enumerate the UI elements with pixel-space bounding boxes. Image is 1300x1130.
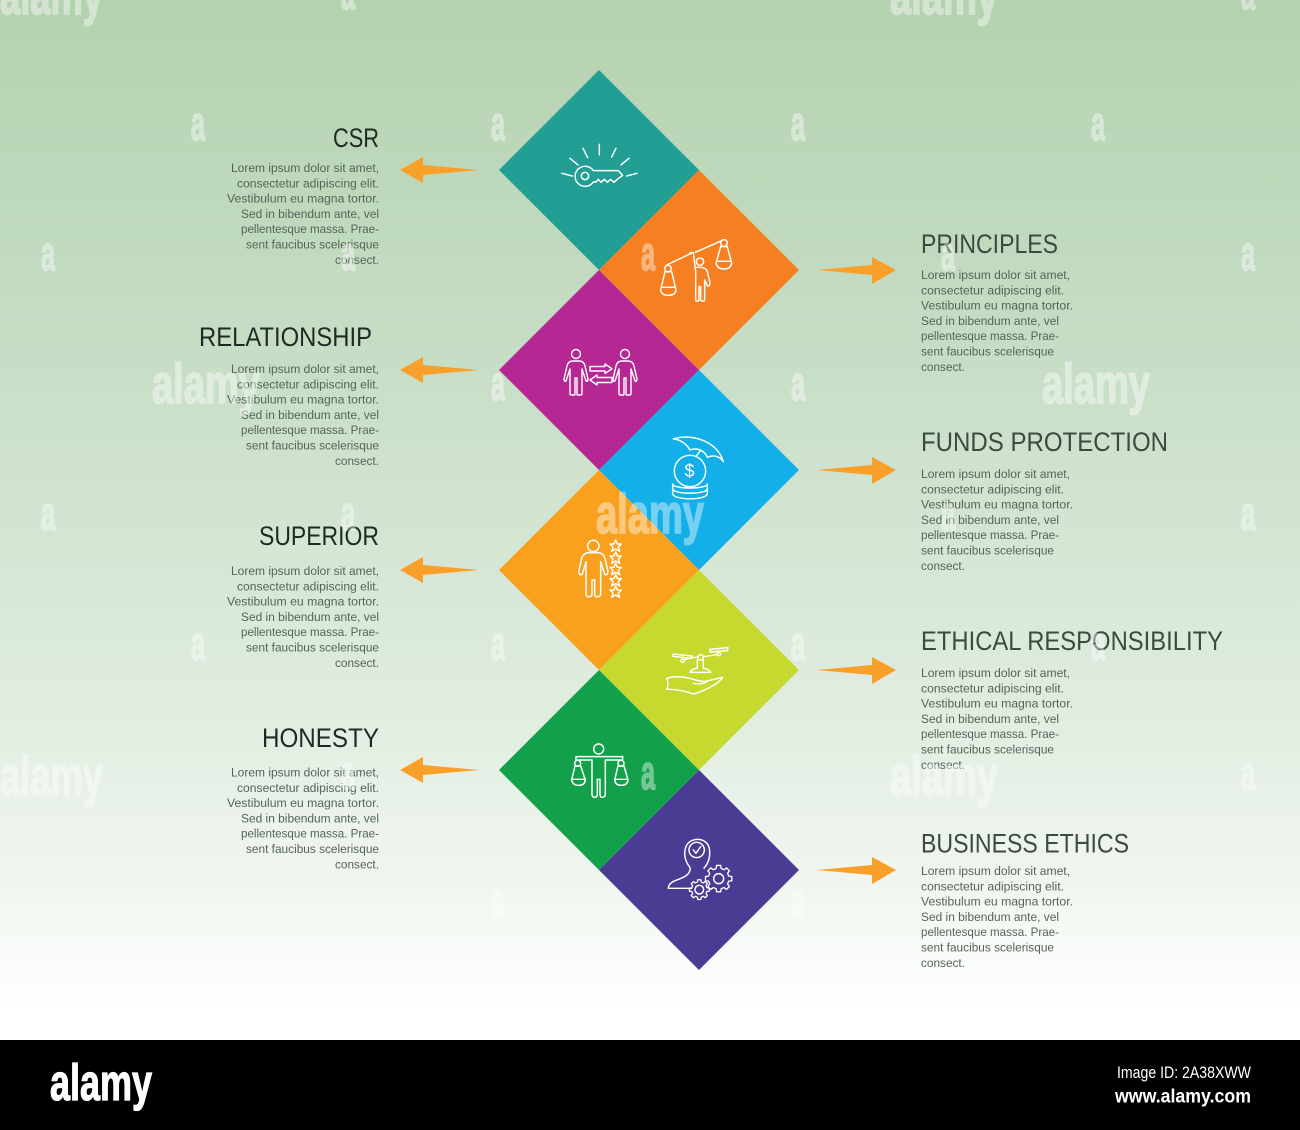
- text block: principles: [921, 268, 1073, 374]
- text block: relationship: [227, 362, 379, 468]
- text block: principles: Vestibulum eu magna tortor.: [921, 299, 1073, 313]
- watermark overlay: a: [1091, 98, 1105, 151]
- text block: superior: sent faucibus scelerisque: [246, 640, 379, 654]
- text block: superior: Lorem ipsum dolor sit amet,: [231, 564, 379, 578]
- diamond: principles: [599, 170, 799, 370]
- heading: funds protection: FUNDS PROTECTION: [921, 427, 1168, 457]
- text block: ethical responsibility: Lorem ipsum dolor sit amet,: [921, 666, 1070, 680]
- watermark overlay: alamy: [152, 352, 260, 415]
- text block: funds protection: Vestibulum eu magna tortor.: [921, 498, 1073, 512]
- watermark overlay: a: [641, 747, 655, 800]
- heading: honesty: HONESTY: [262, 723, 379, 753]
- text block: superior: consect.: [335, 656, 379, 670]
- watermark overlay: a: [1091, 618, 1105, 671]
- text block: honesty: [227, 766, 379, 871]
- watermark overlay: a: [641, 228, 655, 281]
- icon: dollar sign: $: [684, 461, 695, 481]
- watermark overlay: a: [41, 228, 55, 281]
- text block: relationship: Vestibulum eu magna tortor.: [227, 393, 379, 407]
- text block: superior: pellentesque massa. Prae-: [241, 625, 379, 639]
- watermark overlay: a: [341, 488, 355, 541]
- text block: CSR: pellentesque massa. Prae-: [241, 222, 379, 236]
- text block: business ethics: consectetur adipiscing elit.: [921, 879, 1064, 893]
- icon: umbrella over coins: [673, 437, 723, 499]
- diamond: relationship: [499, 270, 699, 470]
- watermark overlay: a: [491, 98, 505, 151]
- watermark overlay: alamy: [1042, 352, 1150, 415]
- watermark overlay: a: [941, 488, 955, 541]
- text block: CSR: consect.: [335, 253, 379, 267]
- text block: relationship: Sed in bibendum ante, vel: [241, 408, 379, 422]
- diamond: CSR: [499, 70, 699, 270]
- text block: ethical responsibility: consectetur adipiscing elit.: [921, 681, 1064, 695]
- diamond chain: [499, 70, 799, 970]
- text block: relationship: consect.: [335, 454, 379, 468]
- watermark overlay: a: [1241, 228, 1255, 281]
- icon: hand holding scale: [667, 648, 728, 694]
- watermark overlay: a: [341, 228, 355, 281]
- text block: funds protection: consect.: [921, 559, 965, 573]
- text block: funds protection: Lorem ipsum dolor sit amet,: [921, 467, 1070, 481]
- text block: superior: consectetur adipiscing elit.: [237, 579, 379, 593]
- text block: honesty: consect.: [335, 857, 379, 871]
- text block: funds protection: consectetur adipiscing elit.: [921, 482, 1064, 496]
- text block: relationship: Lorem ipsum dolor sit amet,: [231, 362, 379, 376]
- icon: person as balance: [572, 744, 628, 797]
- watermark overlay: a: [791, 98, 805, 151]
- text block: funds protection: pellentesque massa. Prae-: [921, 528, 1059, 542]
- watermark overlay: a: [941, 228, 955, 281]
- arrow: CSR: [400, 157, 479, 183]
- watermark overlay: a: [41, 488, 55, 541]
- watermark overlay: a: [1241, 747, 1255, 800]
- text block: funds protection: [921, 467, 1073, 573]
- text block: business ethics: consect.: [921, 956, 965, 970]
- heading: ethical responsibility: ETHICAL RESPONSIBILITY: [921, 626, 1223, 656]
- icon: person lifting scales: [661, 240, 732, 301]
- text block: ethical responsibility: Vestibulum eu magna tortor.: [921, 697, 1073, 711]
- text block: ethical responsibility: sent faucibus scelerisque: [921, 742, 1054, 756]
- heading: superior: SUPERIOR: [259, 521, 379, 551]
- arrow: relationship: [400, 357, 479, 383]
- text block: business ethics: Vestibulum eu magna tortor.: [921, 895, 1073, 909]
- text block: superior: Sed in bibendum ante, vel: [241, 610, 379, 624]
- watermark overlay: a: [341, 747, 355, 800]
- text block: principles: Lorem ipsum dolor sit amet,: [921, 268, 1070, 282]
- text block: principles: consect.: [921, 360, 965, 374]
- icon: person with five stars: [579, 540, 621, 597]
- text block: relationship: consectetur adipiscing elit.: [237, 377, 379, 391]
- text block: honesty: pellentesque massa. Prae-: [241, 827, 379, 841]
- watermark overlay: a: [191, 98, 205, 151]
- icon: two people exchanging: [564, 350, 637, 395]
- text block: business ethics: pellentesque massa. Prae-: [921, 925, 1059, 939]
- diamond: honesty: [499, 670, 699, 870]
- website: www.alamy.com: [1114, 1086, 1251, 1108]
- text block: ethical responsibility: pellentesque massa. Prae-: [921, 727, 1059, 741]
- image id: Image ID: 2A38XWW: [1117, 1063, 1251, 1082]
- watermark overlay: alamy: [596, 482, 704, 545]
- text block: relationship: sent faucibus scelerisque: [246, 438, 379, 452]
- arrow: business ethics: [817, 857, 896, 884]
- text block: principles: Sed in bibendum ante, vel: [921, 314, 1059, 328]
- watermark overlay: a: [491, 358, 505, 411]
- diamond: funds protection: [599, 370, 799, 570]
- watermark overlay: a: [791, 358, 805, 411]
- watermark overlay: alamy: [0, 744, 103, 807]
- text block: CSR: Lorem ipsum dolor sit amet,: [231, 161, 379, 175]
- watermark overlay: a: [1241, 488, 1255, 541]
- text block: business ethics: sent faucibus scelerisque: [921, 940, 1054, 954]
- text block: honesty: Vestibulum eu magna tortor.: [227, 796, 379, 810]
- heading: CSR: CSR: [333, 123, 379, 153]
- text block: honesty: Lorem ipsum dolor sit amet,: [231, 766, 379, 780]
- heading: business ethics: BUSINESS ETHICS: [921, 828, 1129, 858]
- text block: business ethics: Lorem ipsum dolor sit amet,: [921, 864, 1070, 878]
- text block: superior: [227, 564, 379, 670]
- arrow: funds protection: [817, 457, 896, 484]
- footer logo: alamy: [50, 1054, 152, 1111]
- diamond: superior: [499, 470, 699, 670]
- text block: CSR: Sed in bibendum ante, vel: [241, 207, 379, 221]
- watermark overlay: alamy: [890, 744, 998, 807]
- text block: honesty: Sed in bibendum ante, vel: [241, 811, 379, 825]
- text block: principles: consectetur adipiscing elit.: [921, 283, 1064, 297]
- icon: head with check and gears: [668, 839, 732, 900]
- watermark overlay: a: [791, 875, 805, 928]
- text block: CSR: [227, 161, 379, 267]
- text block: honesty: sent faucibus scelerisque: [246, 842, 379, 856]
- footer bar: [0, 1040, 1300, 1130]
- text block: honesty: consectetur adipiscing elit.: [237, 781, 379, 795]
- diamond: ethical responsibility: [599, 570, 799, 770]
- watermark overlay: [0, 0, 1255, 928]
- watermark overlay: a: [491, 875, 505, 928]
- icon: shining key: [562, 144, 637, 186]
- text block: business ethics: Sed in bibendum ante, vel: [921, 910, 1059, 924]
- text block: funds protection: sent faucibus scelerisque: [921, 544, 1054, 558]
- text block: CSR: consectetur adipiscing elit.: [237, 176, 379, 190]
- text block: superior: Vestibulum eu magna tortor.: [227, 595, 379, 609]
- text block: business ethics: [921, 864, 1073, 970]
- text block: relationship: pellentesque massa. Prae-: [241, 423, 379, 437]
- diamond: business ethics: [599, 770, 799, 970]
- text block: principles: pellentesque massa. Prae-: [921, 329, 1059, 343]
- text block: ethical responsibility: Sed in bibendum ante, vel: [921, 712, 1059, 726]
- text block: principles: sent faucibus scelerisque: [921, 344, 1054, 358]
- text block: CSR: sent faucibus scelerisque: [246, 238, 379, 252]
- text block: funds protection: Sed in bibendum ante, vel: [921, 513, 1059, 527]
- watermark overlay: a: [191, 618, 205, 671]
- watermark overlay: a: [791, 618, 805, 671]
- heading: principles: PRINCIPLES: [921, 229, 1058, 259]
- heading: relationship: RELATIONSHIP: [199, 322, 372, 352]
- text block: ethical responsibility: consect.: [921, 758, 965, 772]
- arrow: superior: [400, 557, 479, 583]
- text block: ethical responsibility: [921, 666, 1073, 772]
- arrow: honesty: [400, 757, 479, 783]
- watermark overlay: a: [491, 618, 505, 671]
- arrow: ethical responsibility: [817, 657, 896, 684]
- text block: CSR: Vestibulum eu magna tortor.: [227, 192, 379, 206]
- arrow: principles: [817, 257, 896, 284]
